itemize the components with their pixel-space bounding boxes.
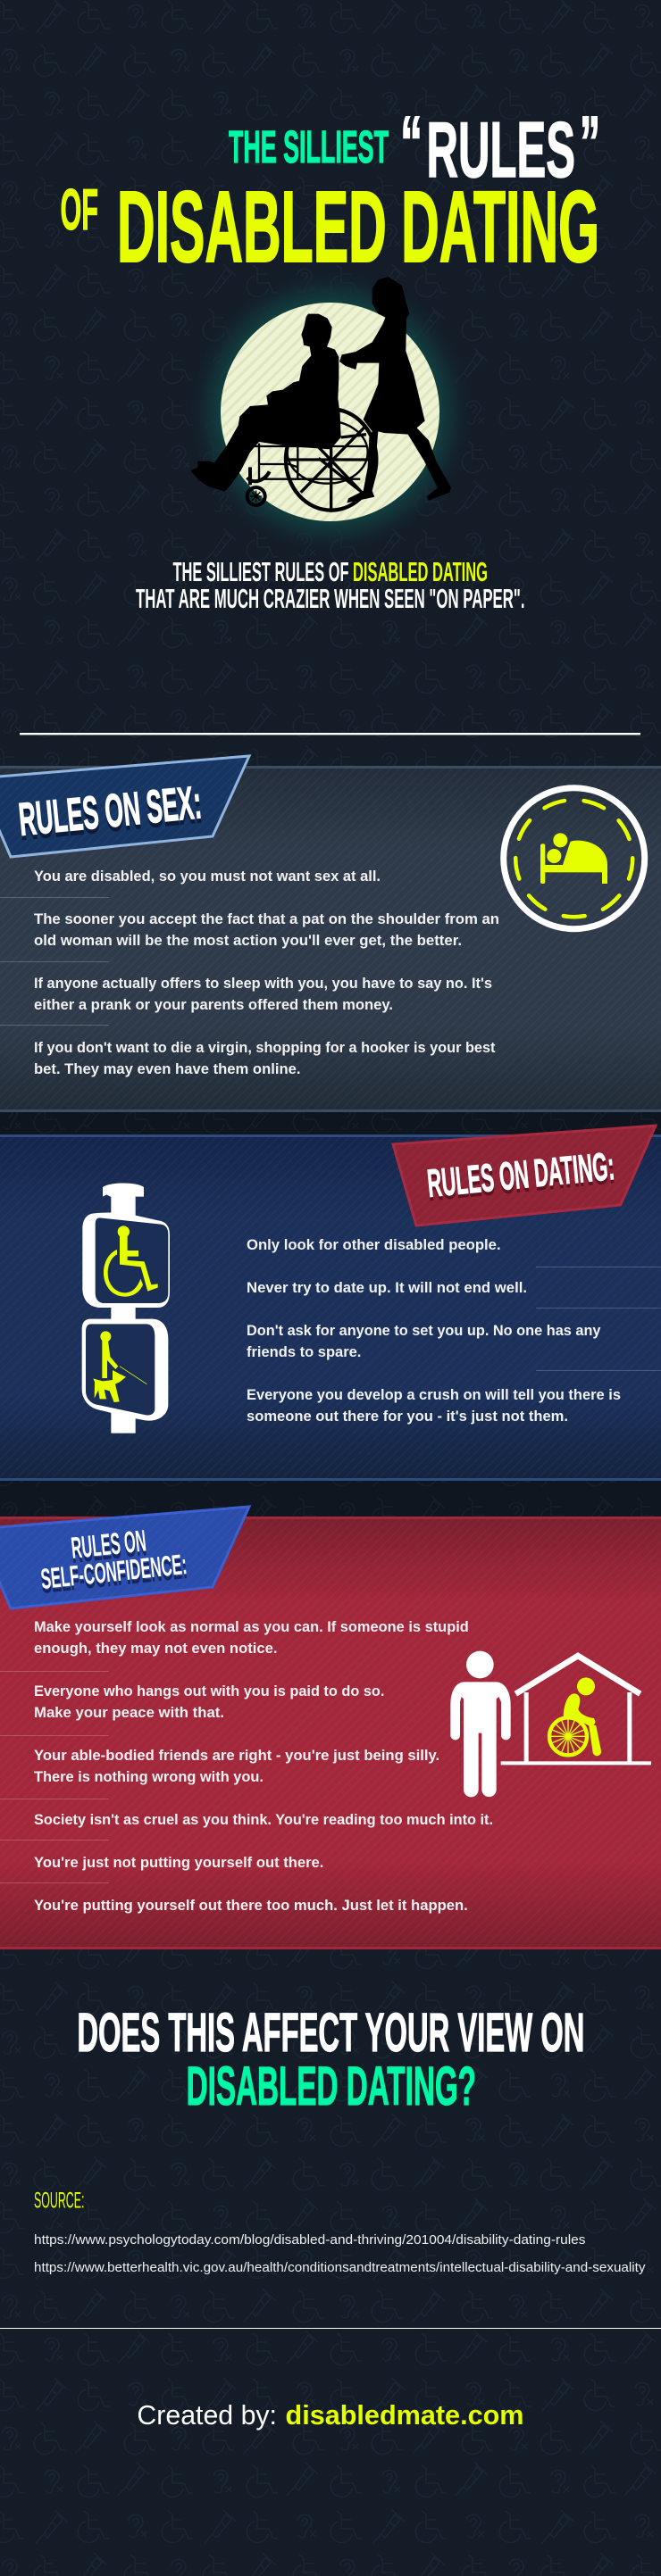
rules text: either a prank or your parents offered them money. bbox=[34, 996, 393, 1013]
banner: rules on self-confidence: RULES ON bbox=[70, 1524, 147, 1566]
icon: person and wheelchair user in house bbox=[450, 1651, 651, 1797]
rules text: You're putting yourself out there too much. Just let it happen. bbox=[34, 1897, 468, 1914]
rules text: Make yourself look as normal as you can. If someone is stupid bbox=[34, 1618, 469, 1635]
rules text: Don't ask for anyone to set you up. No one has any bbox=[247, 1322, 601, 1339]
banner: rules on self-confidence: RULES ON bbox=[70, 1528, 148, 1570]
rules text bbox=[0, 1618, 493, 1914]
rules text bbox=[0, 868, 499, 1077]
banner: rules on sex bbox=[0, 756, 249, 857]
icon: bed in circle bbox=[504, 788, 645, 929]
rules text: Everyone who hangs out with you is paid to do so. bbox=[34, 1683, 384, 1699]
panel: rules on dating bbox=[0, 1126, 661, 1481]
title: OF bbox=[61, 177, 98, 242]
panel: rules on sex bbox=[0, 756, 661, 1112]
subtitle: THE SILLIEST RULES OF bbox=[173, 557, 348, 587]
rules text: Only look for other disabled people. bbox=[247, 1236, 501, 1253]
icon: accessibility signs bbox=[82, 1183, 170, 1433]
credit: disabledmate.com bbox=[286, 2399, 523, 2431]
panel: rules on self-confidence bbox=[0, 1507, 661, 1949]
rules text: You are disabled, so you must not want sex at all. bbox=[34, 868, 381, 885]
banner: rules on self-confidence: SELF-CONFIDENCE: bbox=[39, 1548, 188, 1595]
rules text: old woman will be the most action you'll ever get, the better. bbox=[34, 932, 462, 949]
rules text: If you don't want to die a virgin, shopping for a hooker is your best bbox=[34, 1039, 496, 1056]
rules text: enough, they may not even notice. bbox=[34, 1640, 277, 1657]
banner: rules on sex: RULES ON SEX: bbox=[17, 781, 205, 851]
title: “ bbox=[400, 101, 423, 185]
sources: https://www.betterhealth.vic.gov.au/health/conditionsandtreatments/intellectual-disability-and-sexuality bbox=[34, 2260, 646, 2275]
sources: SOURCE: bbox=[34, 2188, 84, 2213]
rules text: There is nothing wrong with you. bbox=[34, 1768, 264, 1785]
rules text: bet. They may even have them online. bbox=[34, 1060, 300, 1077]
banner: rules on sex: RULES ON SEX: bbox=[17, 777, 204, 846]
sources: https://www.psychologytoday.com/blog/disabled-and-thriving/201004/disability-dating-rules bbox=[34, 2232, 586, 2248]
rules text: The sooner you accept the fact that a pat on the shoulder from an bbox=[34, 910, 499, 927]
rules text: friends to spare. bbox=[247, 1343, 361, 1360]
rules text: If anyone actually offers to sleep with you, you have to say no. It's bbox=[34, 975, 492, 992]
subtitle bbox=[136, 557, 525, 614]
rules text: Society isn't as cruel as you think. You're reading too much into it. bbox=[34, 1811, 493, 1828]
sources bbox=[34, 2188, 646, 2275]
banner: rules on self-confidence: SELF-CONFIDENCE: bbox=[39, 1552, 188, 1600]
rules text bbox=[247, 1236, 661, 1425]
closing question bbox=[77, 2002, 584, 2116]
banner: rules on self-confidence bbox=[0, 1507, 249, 1608]
hero illustration: couple with wheelchair on moon bbox=[188, 270, 473, 555]
title: ” bbox=[580, 101, 600, 185]
divider bbox=[20, 733, 640, 735]
banner: rules on dating bbox=[393, 1126, 656, 1226]
credit bbox=[137, 2399, 523, 2431]
rules text: You're just not putting yourself out there. bbox=[34, 1854, 323, 1871]
subtitle: DISABLED DATING bbox=[353, 557, 488, 587]
dark strips between panels bbox=[0, 1112, 661, 1517]
rules text: Make your peace with that. bbox=[34, 1704, 224, 1721]
title: THE SILLIEST bbox=[229, 121, 389, 172]
rules text: Everyone you develop a crush on will tell you there is bbox=[247, 1386, 621, 1403]
rules text: Your able-bodied friends are right - you're just being silly. bbox=[34, 1747, 439, 1764]
title bbox=[61, 101, 600, 283]
rules text: Never try to date up. It will not end well. bbox=[247, 1279, 527, 1296]
rules text: someone out there for you - it's just not them. bbox=[247, 1408, 568, 1425]
credit: Created by: bbox=[137, 2399, 277, 2431]
divider bbox=[0, 2328, 661, 2329]
